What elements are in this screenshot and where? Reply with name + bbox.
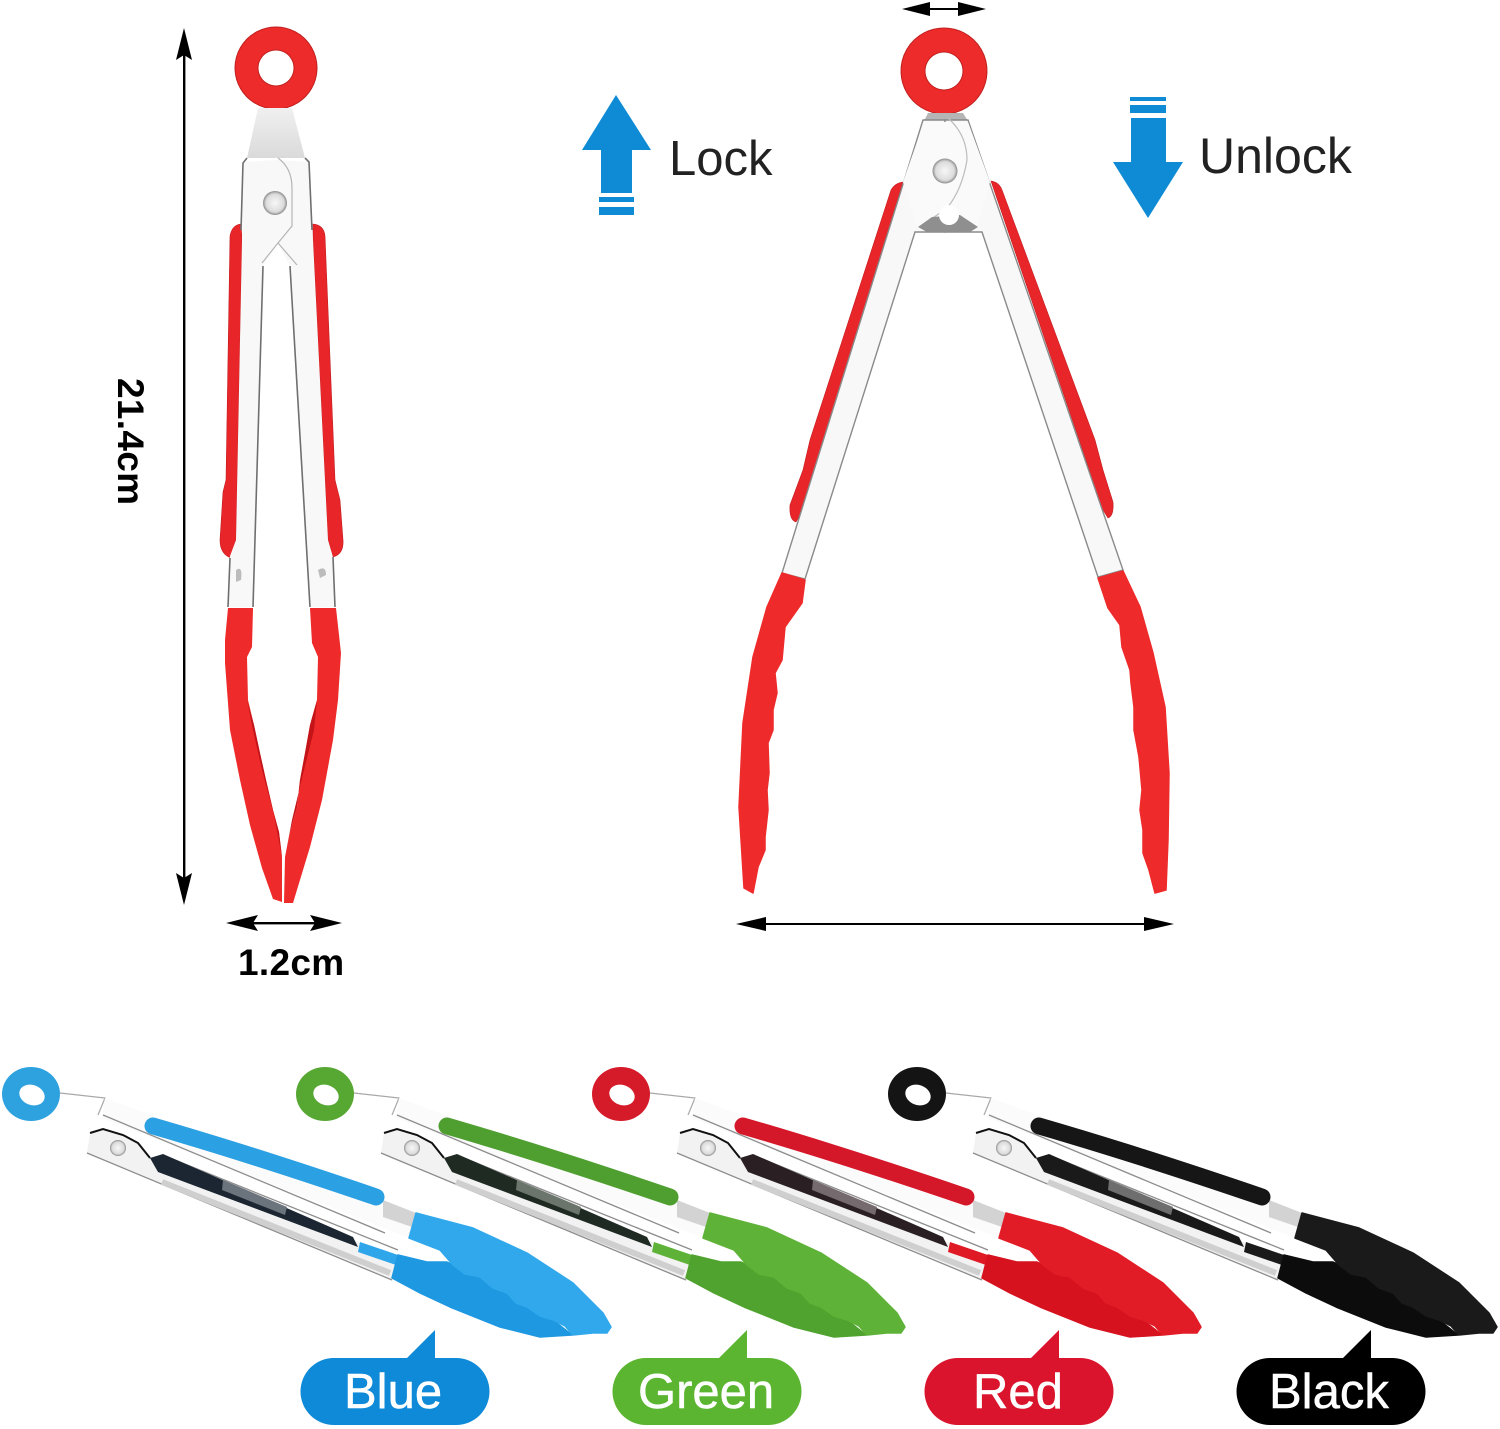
rivet [263, 191, 287, 215]
icon: ring [2, 1067, 60, 1121]
ring hole [606, 1081, 638, 1109]
right silicone sleeve [991, 181, 1113, 518]
silicone sleeve [153, 1126, 376, 1197]
lower metal arm [87, 1129, 398, 1280]
neck line [946, 1093, 991, 1115]
left arm dimples [236, 569, 241, 582]
unlock label: Unlock [1199, 128, 1353, 184]
ring hole [902, 1081, 934, 1109]
upper metal arm [102, 1098, 416, 1238]
green label bubble [612, 1330, 802, 1425]
upper arm tail [677, 1200, 710, 1227]
ring hole [310, 1081, 342, 1109]
ring width arrow [902, 2, 986, 16]
rivet [932, 158, 958, 184]
hinge line [976, 1129, 1036, 1158]
opening width arrow [736, 917, 1174, 931]
lower arm streak [1048, 1182, 1276, 1273]
open red tongs [739, 28, 1169, 893]
black label bubble [1236, 1330, 1426, 1425]
left silicone tip [739, 573, 805, 893]
blue label bubble: Blue [344, 1365, 442, 1419]
red label bubble: Red [973, 1365, 1063, 1419]
icon: ring [888, 1067, 946, 1121]
rivet [110, 1140, 126, 1156]
hinge curve [920, 118, 967, 227]
hinge plate lines [262, 158, 297, 265]
icon: hanging ring [235, 27, 317, 109]
lower metal arm [381, 1129, 692, 1280]
metal edge lines [228, 158, 335, 607]
right silicone tip [284, 608, 341, 903]
upper metal arm [396, 1098, 710, 1238]
lower arm tail [1244, 1242, 1284, 1265]
lower head [982, 1255, 1162, 1337]
gap reflection [812, 1180, 877, 1215]
metal lines [87, 1115, 398, 1280]
left metal arm [782, 120, 945, 579]
icon: ring [296, 1067, 354, 1121]
metal lines [973, 1115, 1284, 1280]
upper metal arm [692, 1098, 1006, 1238]
right metal arm [278, 160, 335, 607]
blue label bubble [300, 1330, 490, 1425]
unlock arrow [1113, 97, 1183, 218]
upper head [703, 1213, 905, 1335]
length dimension arrow [176, 28, 192, 905]
metal lines [677, 1115, 988, 1280]
gap reflection [222, 1180, 287, 1215]
metal neck [924, 113, 968, 121]
icon: hanging ring [901, 28, 987, 114]
dark gap [150, 1154, 358, 1247]
upper head [409, 1213, 611, 1335]
upper arm tail [973, 1200, 1006, 1227]
icon: ring [592, 1067, 650, 1121]
width dimension arrow [226, 915, 342, 931]
red tongs [592, 1067, 1201, 1337]
hinge line [384, 1129, 444, 1158]
gap reflection [1108, 1180, 1173, 1215]
closed red tongs [220, 27, 343, 903]
lower arm tail [652, 1242, 692, 1265]
upper head [1295, 1213, 1497, 1335]
metal neck [247, 108, 305, 158]
lower head [1278, 1255, 1458, 1337]
lower head [392, 1255, 572, 1337]
rivet [700, 1140, 716, 1156]
width label: 1.2cm [238, 942, 344, 983]
lower metal arm [973, 1129, 1284, 1280]
left silicone sleeve [790, 182, 903, 522]
neck line [650, 1093, 695, 1115]
hinge plate [903, 122, 990, 229]
notch opening [939, 205, 959, 225]
right silicone sleeve [313, 224, 343, 557]
upper arm tail [1269, 1200, 1302, 1227]
right arm dimples [318, 568, 326, 578]
right metal arm [945, 120, 1123, 577]
lower arm tail [948, 1242, 988, 1265]
black tongs [888, 1067, 1497, 1337]
rivet [404, 1140, 420, 1156]
silicone sleeve [1039, 1126, 1262, 1197]
upper arm tail [383, 1200, 416, 1227]
dark gap [444, 1154, 652, 1247]
black label bubble: Black [1269, 1365, 1389, 1419]
lock arrow [582, 95, 651, 215]
right silicone tip [1098, 571, 1169, 893]
neck line [354, 1093, 399, 1115]
lock label: Lock [669, 132, 773, 186]
neck line [60, 1093, 105, 1115]
metal lines [381, 1115, 692, 1280]
dark gap [740, 1154, 948, 1247]
lower arm streak [162, 1182, 390, 1273]
tip scallop shading [247, 700, 317, 857]
dark gap [1036, 1154, 1244, 1247]
gap reflection [516, 1180, 581, 1215]
lower head [686, 1255, 866, 1337]
silicone sleeve [447, 1126, 670, 1197]
lower metal arm [677, 1129, 988, 1280]
length label: 21.4cm [110, 378, 151, 505]
lower arm tail [358, 1242, 398, 1265]
upper head [999, 1213, 1201, 1335]
lower arm streak [456, 1182, 684, 1273]
lower arm streak [752, 1182, 980, 1273]
silicone sleeve [743, 1126, 966, 1197]
ring hole [16, 1081, 48, 1109]
hinge line [680, 1129, 740, 1158]
hinge line [90, 1129, 150, 1158]
rivet [996, 1140, 1012, 1156]
hinge notch [918, 215, 978, 232]
blue tongs [2, 1067, 611, 1337]
upper metal arm [988, 1098, 1302, 1238]
green label bubble: Green [638, 1365, 774, 1419]
red label bubble [924, 1330, 1113, 1425]
left metal arm [228, 160, 278, 607]
green tongs [296, 1067, 905, 1337]
left silicone sleeve [220, 224, 242, 558]
left silicone tip [225, 608, 282, 902]
